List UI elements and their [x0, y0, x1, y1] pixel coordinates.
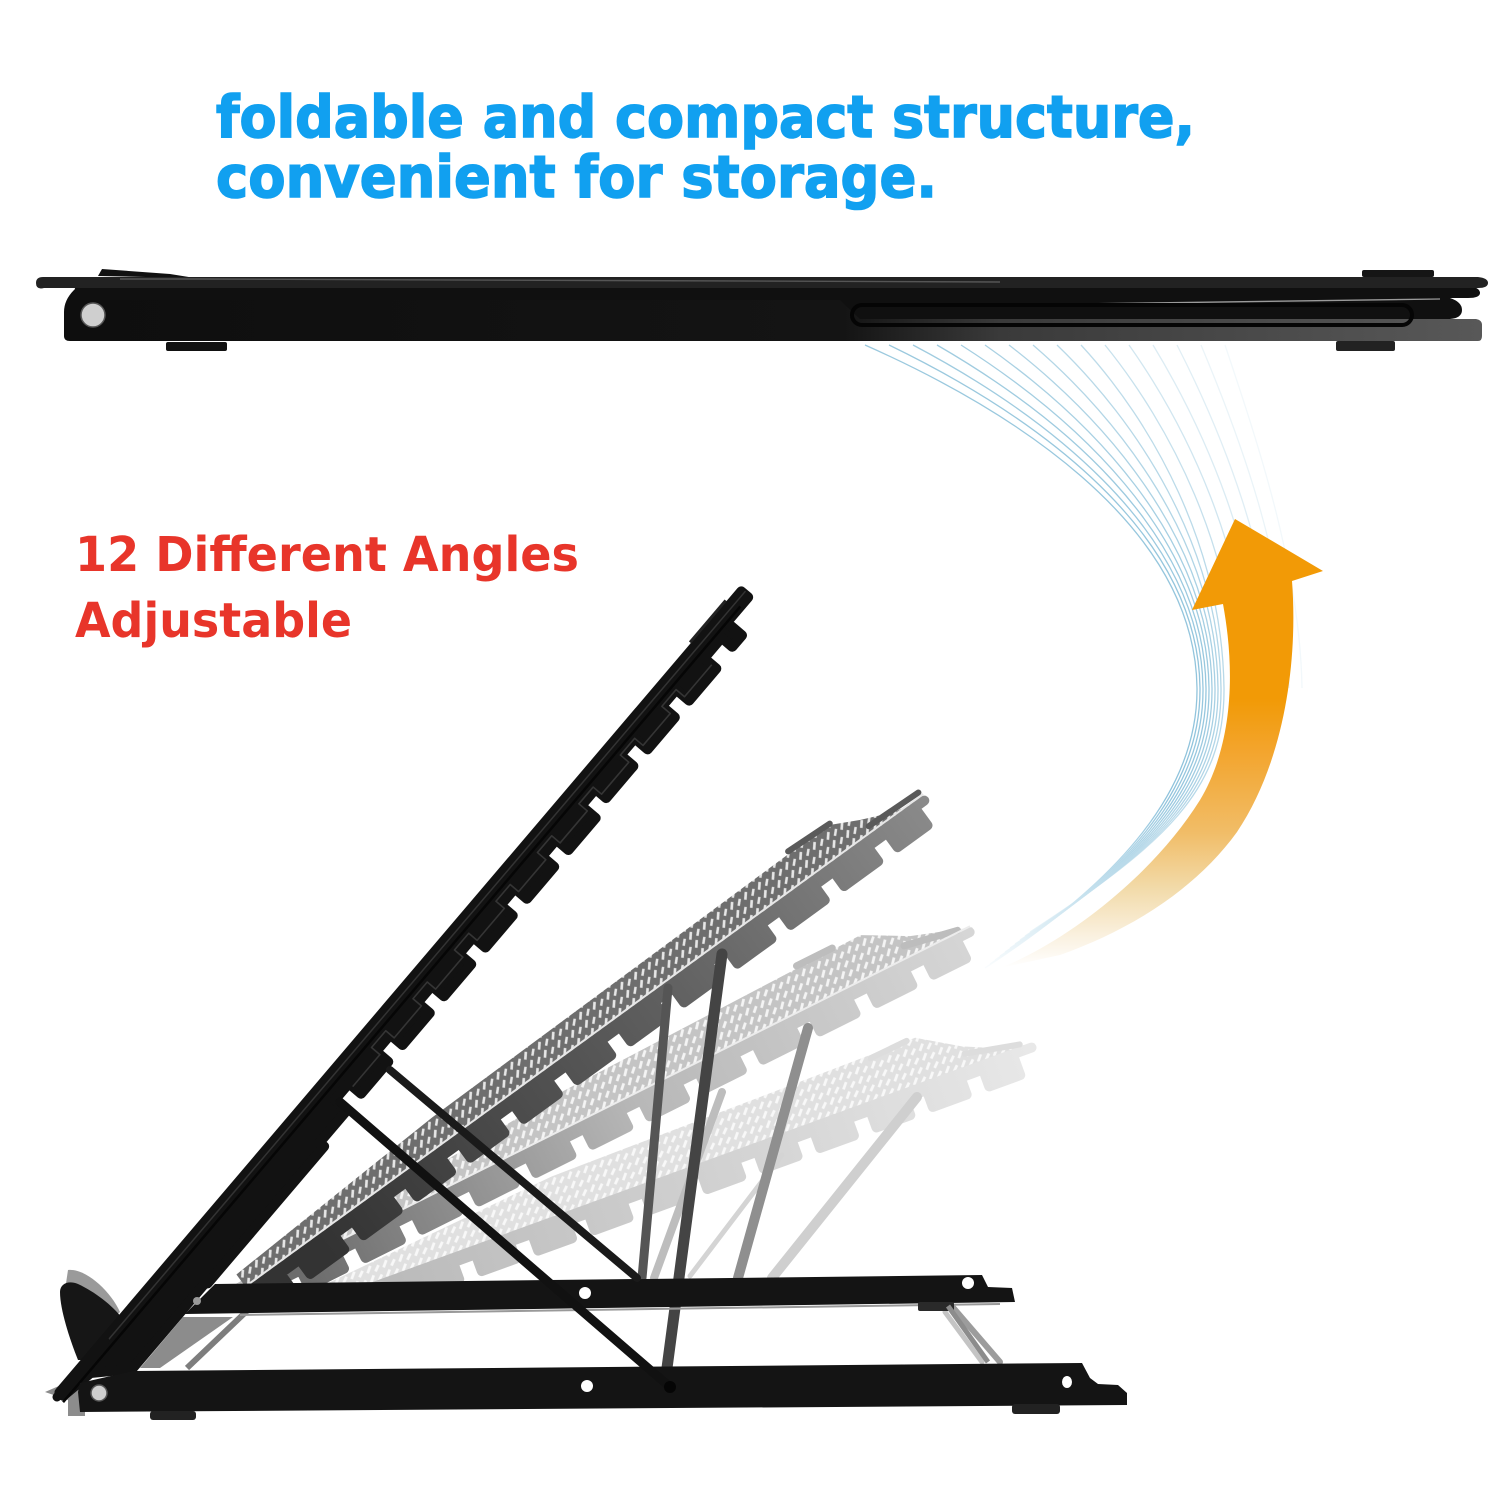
- hole: [962, 1277, 974, 1289]
- folded stand: side view: [36, 269, 1488, 351]
- hole: [1062, 1376, 1072, 1388]
- ghost tail: [45, 1382, 85, 1416]
- ghost panel 3: lowest angle: [330, 1038, 1036, 1282]
- rod front: [340, 1102, 670, 1387]
- callout: 12 different angles adjustable: 12 Different Angles: [75, 527, 579, 583]
- screw: [91, 1385, 107, 1401]
- plate highlight: [120, 279, 1000, 282]
- rod dark left: [642, 988, 668, 1278]
- top pad: [690, 600, 726, 642]
- panel lip tip over the arm: [57, 1341, 105, 1397]
- tooth emboss: [344, 658, 712, 1087]
- lower arm of base: [78, 1363, 1127, 1420]
- right foot: [1012, 1404, 1060, 1414]
- ghost shadows at base: [45, 1270, 233, 1416]
- support rods: black front: [340, 1070, 676, 1393]
- front fin: [60, 1282, 122, 1360]
- lip shadow: [63, 606, 740, 1402]
- rod dark: [667, 954, 722, 1368]
- light seam: [1000, 299, 1440, 305]
- arm shadow: [240, 1304, 1000, 1315]
- slot: [852, 305, 1412, 325]
- callout: 12 different angles adjustable: [75, 527, 579, 649]
- teeth: [372, 1042, 1036, 1282]
- middle folded layers: [70, 286, 1480, 319]
- upper arm rod: [948, 1306, 988, 1362]
- ghost panel 1: steep angle: [236, 790, 932, 1284]
- ghost fin: [65, 1270, 120, 1330]
- mesh: [330, 1038, 1034, 1282]
- ghost panels clipped above the arm: [236, 790, 1036, 1284]
- bottom bar: [64, 290, 1482, 341]
- lip highlight: [342, 926, 970, 1240]
- mesh: [236, 927, 972, 1284]
- end pad: [785, 790, 922, 854]
- heading: foldable and compact structure: foldable and compact structure,: [216, 83, 1195, 151]
- top left pad: [98, 269, 195, 278]
- front chrome rod: [187, 1308, 250, 1368]
- hole: [579, 1287, 591, 1299]
- rod rear: [390, 1070, 637, 1278]
- teeth: [286, 927, 975, 1283]
- ghost panel 2: middle angle: [236, 926, 975, 1284]
- chrome shadow rod: [945, 1312, 982, 1362]
- teeth: [253, 801, 937, 1306]
- ghost triangle: [140, 1317, 233, 1368]
- callout: 12 different angles adjustable: Adjustable: [75, 593, 352, 649]
- rod mid: [738, 1028, 808, 1278]
- top right pad: [1362, 270, 1434, 277]
- chrome rear rod: [950, 1304, 1000, 1362]
- mesh: [227, 768, 927, 1289]
- rod socket block: [918, 1302, 954, 1311]
- panel body with teeth: [59, 591, 773, 1420]
- upper arm of base: [185, 1275, 1015, 1315]
- right foot: [1336, 341, 1395, 351]
- rod pale left: [654, 1092, 722, 1278]
- end pad: [868, 1038, 1023, 1060]
- arm body: [185, 1275, 1015, 1314]
- left foot: [166, 342, 227, 351]
- arrow: orange upward curve: [1000, 519, 1323, 968]
- motion lines: curved blue arc: [865, 345, 1302, 968]
- heading: foldable and compact structure: [216, 83, 1195, 211]
- lip highlight: [245, 794, 923, 1287]
- end pad: [793, 926, 961, 970]
- screw: [81, 303, 105, 327]
- hole: [581, 1380, 593, 1392]
- ghost support rods: [642, 954, 1000, 1368]
- rod pale: [690, 1155, 782, 1276]
- rod socket: [664, 1381, 676, 1393]
- lip line: [59, 591, 746, 1398]
- left foot: [150, 1411, 196, 1420]
- panel pivot screw: [193, 1297, 201, 1305]
- top plate lip: [36, 277, 1488, 288]
- black panel: raised front: [52, 585, 775, 1424]
- arm body: [78, 1363, 1127, 1412]
- rod light right: [772, 1097, 917, 1278]
- heading: foldable and compact structure: convenient for storage.: [216, 143, 937, 211]
